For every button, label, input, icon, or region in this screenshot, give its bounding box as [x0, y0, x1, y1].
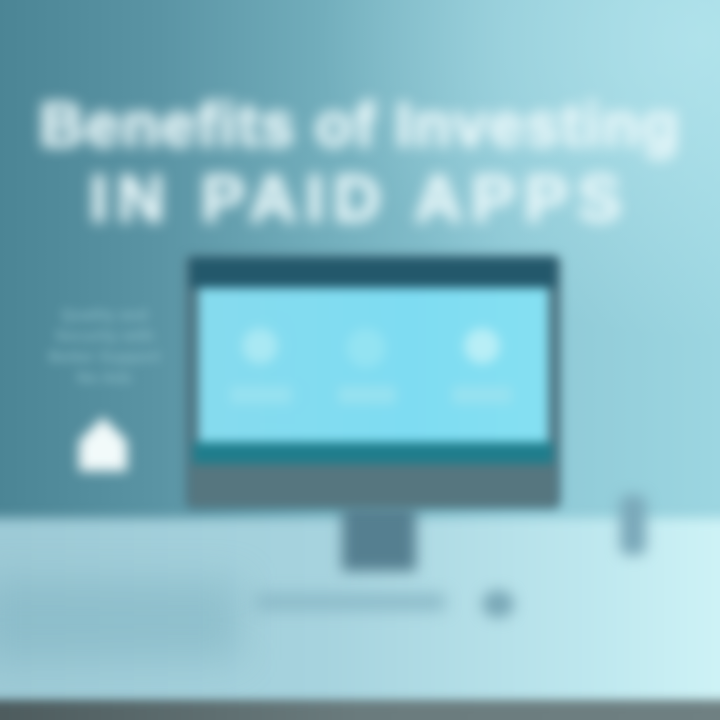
screen text centre [338, 386, 396, 404]
left text block: Quality and [61, 307, 148, 324]
title: IN PAID APPS [90, 161, 630, 235]
icon: house [70, 411, 136, 480]
screen text left [230, 386, 292, 404]
bottom bezel [190, 464, 556, 506]
background glow [0, 0, 720, 520]
keyboard [255, 594, 445, 610]
title [32, 91, 684, 235]
screen icon left [242, 328, 278, 364]
left text block: Security with [55, 328, 154, 345]
screen text right [452, 386, 512, 404]
left text block: Better Support [48, 349, 160, 366]
screen icon right [464, 328, 500, 364]
mouse [482, 590, 514, 618]
desk shading [0, 580, 240, 660]
left text block [48, 307, 160, 387]
left text block: No Ads [77, 370, 132, 387]
title: Benefits of Investing [39, 91, 681, 160]
top bezel [190, 258, 556, 288]
screen [199, 288, 548, 442]
desk [0, 518, 720, 708]
bottom strip [0, 700, 720, 720]
monitor [181, 248, 568, 516]
monitor stand [342, 505, 416, 571]
teal bar [193, 442, 553, 464]
monitor frame [185, 255, 561, 509]
screen icon centre [346, 328, 386, 368]
phone object [620, 495, 646, 555]
